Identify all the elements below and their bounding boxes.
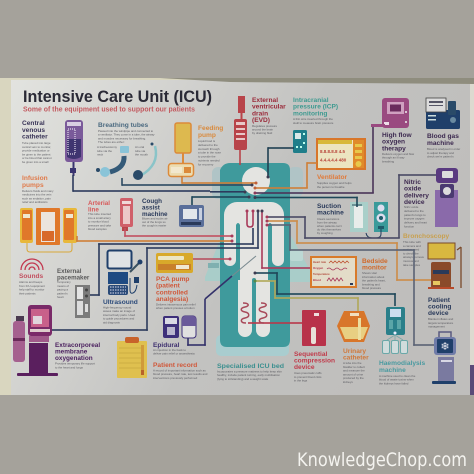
heading: Intracranial xyxy=(293,97,329,104)
description: Alarms and beeps xyxy=(19,280,42,284)
heading: Breathing tubes xyxy=(98,122,149,129)
label: nose tube: tube via xyxy=(135,149,146,153)
heading: oxygen xyxy=(382,139,405,146)
description: Incorporates a pressure mattress to help keep skin xyxy=(217,370,282,374)
line: epidural xyxy=(187,256,256,346)
heading: Central xyxy=(22,120,45,127)
panel: patient record xyxy=(117,337,208,380)
description: help staff to monitor xyxy=(19,288,44,292)
panel: urinary catheter xyxy=(337,311,370,384)
description: suction used xyxy=(403,248,420,252)
icon: ICP monitor xyxy=(293,130,307,153)
panel: infusion pumps xyxy=(20,175,77,252)
description: waves make an image of xyxy=(103,309,135,313)
panel: external pacemaker xyxy=(57,268,90,318)
description: to provide the xyxy=(198,155,216,159)
line: bronchoscopy xyxy=(267,220,431,281)
heading: External xyxy=(252,97,278,104)
description: (lying to sit/standing) and a weight scale xyxy=(217,377,269,381)
description: the kidneys have failed xyxy=(379,381,409,385)
description: to prevent blood clots xyxy=(294,375,322,379)
icon: dialysis machine and bags xyxy=(382,307,408,354)
description: deliver pain relief or anaesthesia xyxy=(153,352,195,356)
heading: machine xyxy=(379,367,406,374)
panel: external ventricular drain xyxy=(234,96,286,150)
title: Intensive Care Unit (ICU) xyxy=(23,88,212,106)
description: by draining fluid xyxy=(252,131,273,135)
panel: high flow oxygen therapy xyxy=(382,98,415,163)
panel: breathing tubes xyxy=(96,122,156,180)
description: delivered to the xyxy=(198,143,218,147)
description: amount of urine xyxy=(343,372,363,376)
description: heart xyxy=(57,295,64,299)
panel: haemodialysis machine xyxy=(379,307,426,385)
connector end dots xyxy=(228,176,270,282)
line: ventilator xyxy=(255,162,317,189)
description: bladder to collect xyxy=(343,365,365,369)
description: around the brain xyxy=(252,128,273,132)
description: do this themselves xyxy=(317,228,341,232)
heading: Infusion xyxy=(22,175,48,182)
heading: Sounds xyxy=(19,273,44,280)
description: blood of waste toxins when xyxy=(379,378,414,382)
panel: blood gas machine xyxy=(426,98,460,159)
description: function xyxy=(404,224,415,228)
icon: pacemaker box xyxy=(75,285,90,318)
description: A thin wire inserted through the xyxy=(293,117,333,121)
description: Uses pneumatic cuffs xyxy=(294,371,322,375)
line: patient cooling xyxy=(267,224,434,346)
description: kidneys xyxy=(343,380,353,384)
heading: (EVD) xyxy=(252,117,270,124)
description: such as sedation, pain xyxy=(22,196,51,200)
description: out of the lungs so xyxy=(142,220,166,224)
description: The tubes are either: xyxy=(98,140,125,144)
heading: pumps xyxy=(22,182,44,189)
heading: machine xyxy=(317,210,344,216)
panel: nitric oxide delivery device xyxy=(404,168,458,228)
description: be given into a small xyxy=(22,160,49,164)
description: delivered to the xyxy=(404,209,424,213)
heading: compression xyxy=(294,358,335,364)
description: interventions previously performed xyxy=(153,376,198,380)
line: high flow oxygen xyxy=(255,124,385,194)
line: ICP monitor xyxy=(267,147,294,176)
icon: high flow device xyxy=(382,98,409,128)
line: PCA pump xyxy=(193,258,230,260)
line: external pacemaker xyxy=(90,228,254,296)
description: Liquid food is xyxy=(198,139,215,143)
description: Blows and sucks air xyxy=(142,216,168,220)
icon: epidural pumps xyxy=(163,316,196,338)
heading: Epidural xyxy=(153,342,180,349)
description: and muscles necessary for breathing. xyxy=(98,136,146,140)
line: feeding pump xyxy=(181,176,256,184)
label: nose tube: An oral xyxy=(135,145,144,149)
panel: ventilator xyxy=(317,139,365,189)
panel: bedside monitor xyxy=(311,257,388,290)
line: bedside monitor xyxy=(261,211,310,269)
panel: specialised ICU bed text xyxy=(217,363,284,381)
description: Delivers intravenous pain relief xyxy=(156,302,196,306)
icon: vital sign monitor: Heart rate xyxy=(313,260,327,264)
description: when patient presses a button xyxy=(156,306,195,310)
icon: ultrasound machine xyxy=(108,250,142,295)
description: improve oxygen xyxy=(404,217,425,221)
description: healthy, include patient turning, early mobilisation xyxy=(217,373,280,377)
heading: machine xyxy=(427,140,454,147)
line: chest U tube xyxy=(247,211,253,227)
heading: External xyxy=(57,268,81,275)
description: Shows vital xyxy=(362,271,377,275)
description: by coughing xyxy=(317,231,333,235)
line: cough assist xyxy=(191,196,249,205)
heading: device xyxy=(294,364,315,371)
heading: Bedside xyxy=(362,258,388,265)
heading: PCA pump xyxy=(156,276,189,283)
heading: Extracorporeal xyxy=(55,342,100,349)
line: nitric oxide xyxy=(267,174,436,239)
description: pressure and take xyxy=(88,223,112,227)
description: A machine used to clean the xyxy=(379,374,415,378)
heading: device xyxy=(428,310,449,317)
heading: Feeding xyxy=(198,125,223,132)
description: Clears secretions xyxy=(317,217,339,221)
panel: extracorporeal membrane oxygenation xyxy=(13,305,100,376)
description: their patients xyxy=(19,291,36,295)
description: mucous and xyxy=(403,259,419,263)
heading: Ultrasound xyxy=(103,299,138,306)
heading: oxygenation xyxy=(55,355,93,362)
description: This tube inserted xyxy=(88,212,111,216)
description: aid diagnosis xyxy=(103,320,120,324)
heading: Haemodialysis xyxy=(379,360,425,367)
panel: intracranial pressure monitoring xyxy=(293,97,338,153)
icon: blood gas analyser xyxy=(426,98,460,129)
description: Delivers oxygen and flow xyxy=(382,152,414,156)
heading: Patient xyxy=(428,297,450,304)
panel: central venous catheter xyxy=(22,120,83,176)
heading: pacemaker xyxy=(57,275,90,282)
description: breathing xyxy=(382,159,394,163)
description: through an ill way xyxy=(382,156,405,160)
description: internal body parts. Used xyxy=(103,313,136,317)
heading: device xyxy=(404,199,425,206)
description: to monitor blood xyxy=(88,220,109,224)
description: to adjust therapy and xyxy=(427,151,454,155)
specialised ICU bed illustration xyxy=(205,163,311,356)
icon: bronchoscopy tower xyxy=(428,243,461,289)
heading: monitor xyxy=(362,264,387,272)
panel: patient cooling device xyxy=(428,297,456,384)
description: means of xyxy=(57,284,69,288)
icon: compression pump xyxy=(302,310,326,346)
heading: machine xyxy=(142,211,168,218)
heading: Blood gas xyxy=(427,133,459,140)
icon: vital sign monitor: Blood xyxy=(313,278,321,282)
description: to guide procedures and xyxy=(103,317,135,321)
icon: clipboard xyxy=(117,337,147,378)
description: information about xyxy=(362,275,385,279)
heading: pump xyxy=(198,132,216,139)
panel: suction machine xyxy=(317,202,388,238)
heading: Arterial xyxy=(88,200,110,207)
description: Blanket inflates and xyxy=(428,317,453,321)
description: for recovery xyxy=(198,162,214,166)
description: Tube placed into large xyxy=(22,141,50,145)
description: breathing and xyxy=(362,282,380,286)
description: Supplies oxygen and helps xyxy=(317,181,352,185)
panel: arterial line xyxy=(88,198,133,231)
line: ECMO xyxy=(52,211,259,331)
description: stomach through xyxy=(198,147,220,151)
description: in the legs xyxy=(294,379,308,383)
heading: Bronchoscopy xyxy=(403,233,449,240)
heading: analgesia) xyxy=(156,296,188,303)
description: the cough is easier xyxy=(142,224,166,228)
icon: ECMO machine and cylinder xyxy=(13,305,58,376)
heading: Nitric xyxy=(404,179,421,186)
heading: Suction xyxy=(317,203,341,210)
description: to check the xyxy=(403,251,419,255)
heading: cooling xyxy=(428,304,451,311)
icon: ventilator screen xyxy=(317,139,365,169)
description: nutrients needed xyxy=(198,158,220,162)
icon: EVD chamber xyxy=(234,96,247,150)
icon: cough assist xyxy=(179,205,204,227)
description: High-frequency sound xyxy=(103,306,131,310)
description: An injection in the back to xyxy=(153,348,186,352)
description: blood pressure xyxy=(362,286,382,290)
panel: epidural xyxy=(153,316,196,356)
description: medicines into the vein xyxy=(22,193,52,197)
description: pacing a xyxy=(57,288,68,292)
heading: venous xyxy=(22,127,45,134)
heading: Patient record xyxy=(153,362,197,369)
heading: catheter xyxy=(343,354,369,361)
line: central venous catheter xyxy=(72,175,245,193)
line: suction machine xyxy=(255,197,358,207)
description: Nitric oxide xyxy=(404,205,418,209)
heading: membrane xyxy=(55,349,88,356)
description: A record of important information such as xyxy=(153,368,206,372)
label: mouth tube: tube via the xyxy=(97,149,112,153)
description: central vein to monitor, xyxy=(22,145,51,149)
description: relief and antibiotics xyxy=(22,200,48,204)
description: This tube with xyxy=(403,240,421,244)
description: produced by the xyxy=(343,376,364,380)
description: management xyxy=(428,325,445,329)
description: from ICU equipment xyxy=(19,284,45,288)
line: arterial xyxy=(124,228,232,237)
heading: Urinary xyxy=(343,348,366,355)
heading: controlled xyxy=(156,289,188,296)
line: urinary catheter xyxy=(255,280,359,311)
line: external ventricular drain xyxy=(239,150,241,165)
heading: oxide xyxy=(404,186,422,193)
heading: catheter xyxy=(22,134,48,141)
description: a ventilator. They come in a tube, the airway xyxy=(98,133,155,137)
icon: ventilator screen: 4.4.4.4.4 480 xyxy=(320,158,347,162)
icon: vital sign monitor: Oxygen xyxy=(313,266,324,270)
description: into a small artery xyxy=(88,216,111,220)
heading: monitoring xyxy=(293,110,327,117)
heading: therapy xyxy=(382,145,406,152)
description: provide medication or xyxy=(22,149,50,153)
icon: urine bag xyxy=(337,311,370,342)
description: Regulates pressure xyxy=(252,124,277,128)
poster frame xyxy=(0,78,474,395)
description: or be blood that cannot xyxy=(22,156,52,160)
heading: (patient xyxy=(156,283,181,290)
icon: central line bag xyxy=(65,120,83,176)
panel: PCA pump xyxy=(156,253,196,310)
description: Provides temporary life support xyxy=(55,362,95,366)
heading: Sequential xyxy=(294,351,327,358)
icon: oral tube xyxy=(133,142,156,180)
description: Passed into the windpipe and connected to xyxy=(98,129,153,133)
label: nose tube: the mouth xyxy=(135,153,148,157)
panel: cough assist machine xyxy=(142,198,204,228)
description: from the airway xyxy=(317,220,337,224)
description: and measure the xyxy=(343,369,365,373)
heading: assist xyxy=(142,204,161,212)
label: mouth tube: neck xyxy=(97,153,104,157)
icon: sound arcs xyxy=(21,259,43,270)
subtitle: Some of the equipment used to support our patients xyxy=(23,106,195,114)
description: Delivers fluids and many xyxy=(22,189,54,193)
icon: feeding bag and pump xyxy=(168,123,194,176)
icon: vital sign monitor: Temperature xyxy=(313,272,330,276)
heading: Ventilator xyxy=(317,174,347,181)
description: targets temperature xyxy=(428,321,454,325)
icon: nitric oxide device xyxy=(435,168,458,227)
description: a tube in the nose xyxy=(198,151,221,155)
description: be given to the patient xyxy=(22,152,51,156)
description: when patients can't xyxy=(317,224,342,228)
description: the patient's heart, xyxy=(362,279,386,283)
description: blood pressure, heart rate, test results and xyxy=(153,372,208,376)
description: a camera and xyxy=(403,244,421,248)
icon: vital sign monitor xyxy=(311,257,356,287)
heading: delivery xyxy=(404,192,429,199)
icon: arterial bag xyxy=(120,198,133,231)
icon: suction machine xyxy=(350,202,388,238)
description: skull to measure brain pressure xyxy=(293,121,334,125)
heading: line xyxy=(88,206,99,213)
icon: PCA pump xyxy=(156,253,193,273)
heading: ventricular xyxy=(252,104,286,111)
heading: pressure (ICP) xyxy=(293,104,338,111)
description: blood samples xyxy=(88,227,107,231)
heading: Cough xyxy=(142,198,162,205)
icon: tracheostomy tube xyxy=(96,146,129,177)
label: mouth tube: A tracheostomy xyxy=(97,145,117,149)
description: Temporary xyxy=(57,280,71,284)
patient body xyxy=(224,167,284,337)
description: airways, remove xyxy=(403,255,424,259)
description: the person to breathe xyxy=(317,185,345,189)
panel: bronchoscopy xyxy=(403,233,461,289)
line: sequential compression xyxy=(241,303,302,324)
panel: feeding pump xyxy=(168,123,223,176)
description: patient's xyxy=(57,291,68,295)
description: to the heart and lungs xyxy=(55,365,84,369)
connector lines xyxy=(52,124,436,346)
panel: ultrasound xyxy=(103,250,142,324)
description: delivery and heart xyxy=(404,221,427,225)
icon: three infusion pumps xyxy=(20,208,77,252)
line: breathing tube xyxy=(121,178,252,186)
description: patient's lungs to xyxy=(404,213,426,217)
panel: sounds xyxy=(19,259,45,295)
description: check we're patient's xyxy=(427,155,454,159)
line: infusion pumps xyxy=(76,236,232,242)
heading: drain xyxy=(252,110,268,117)
heading: Specialised ICU bed xyxy=(217,363,284,370)
description: Blood is analysed in order xyxy=(427,147,460,151)
heading: High flow xyxy=(382,132,412,139)
line: haemodialysis xyxy=(255,272,396,306)
panel: sequential compression device xyxy=(294,310,335,383)
description: A tube into the xyxy=(343,361,361,365)
icon: ventilator screen: 8.8.8.8.8 4.5 xyxy=(320,149,346,154)
description: take samples xyxy=(403,263,421,267)
icon: cooling unit: ❄ xyxy=(440,340,450,353)
